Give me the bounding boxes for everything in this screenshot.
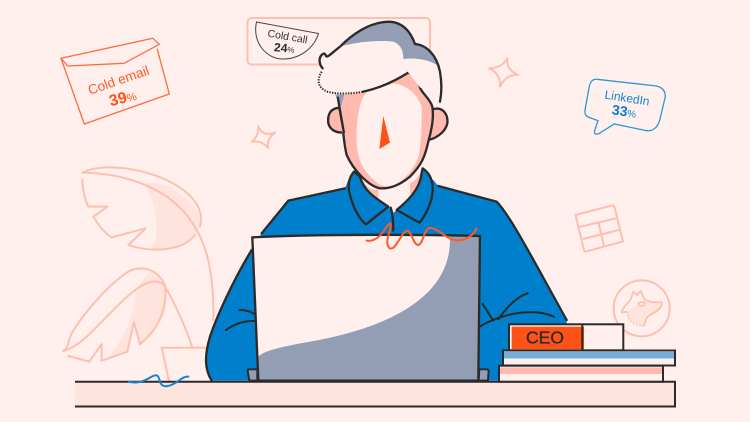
- shirt: [206, 180, 567, 381]
- CEO nameplate: CEO: [526, 328, 564, 348]
- face skin: [339, 73, 433, 188]
- laptop: [248, 235, 489, 381]
- icon: plant: [63, 167, 213, 362]
- ear left: [328, 108, 344, 132]
- icon: cold call semicircle: [256, 22, 318, 59]
- sleeve creases: [226, 293, 554, 330]
- panel: cold call card: [248, 18, 430, 64]
- icon: sparkle left: [252, 126, 275, 148]
- icon: linkedin speech bubble: LinkedIn: [604, 88, 651, 109]
- laptop feet: [248, 369, 489, 381]
- face highlight: [357, 83, 422, 187]
- blue scribble: [129, 375, 188, 386]
- orange scribble: [367, 223, 477, 249]
- books: [499, 350, 675, 382]
- icon: cold email envelope: 39%: [107, 87, 139, 110]
- icon: linkedin speech bubble: [585, 79, 665, 134]
- head: [319, 22, 447, 188]
- icon: nose: [379, 116, 390, 149]
- icon: fox badge: [614, 280, 670, 336]
- neck: [359, 163, 423, 213]
- icon: cold call semicircle: 24%: [274, 40, 295, 56]
- collar: [349, 168, 433, 231]
- ear right: [428, 109, 447, 140]
- face outline: [343, 73, 433, 188]
- hair: [319, 22, 441, 133]
- icon: cold email envelope: Cold email: [86, 63, 151, 98]
- icon: cold call semicircle: Cold call: [267, 28, 308, 46]
- icon: table: [576, 205, 623, 252]
- CEO nameplate: [509, 324, 623, 350]
- desk: [75, 382, 675, 406]
- icon: sparkle right: [489, 58, 518, 87]
- icon: linkedin speech bubble: 33%: [611, 101, 638, 121]
- plant pot: [162, 348, 210, 381]
- icon: cold email envelope: [61, 38, 169, 124]
